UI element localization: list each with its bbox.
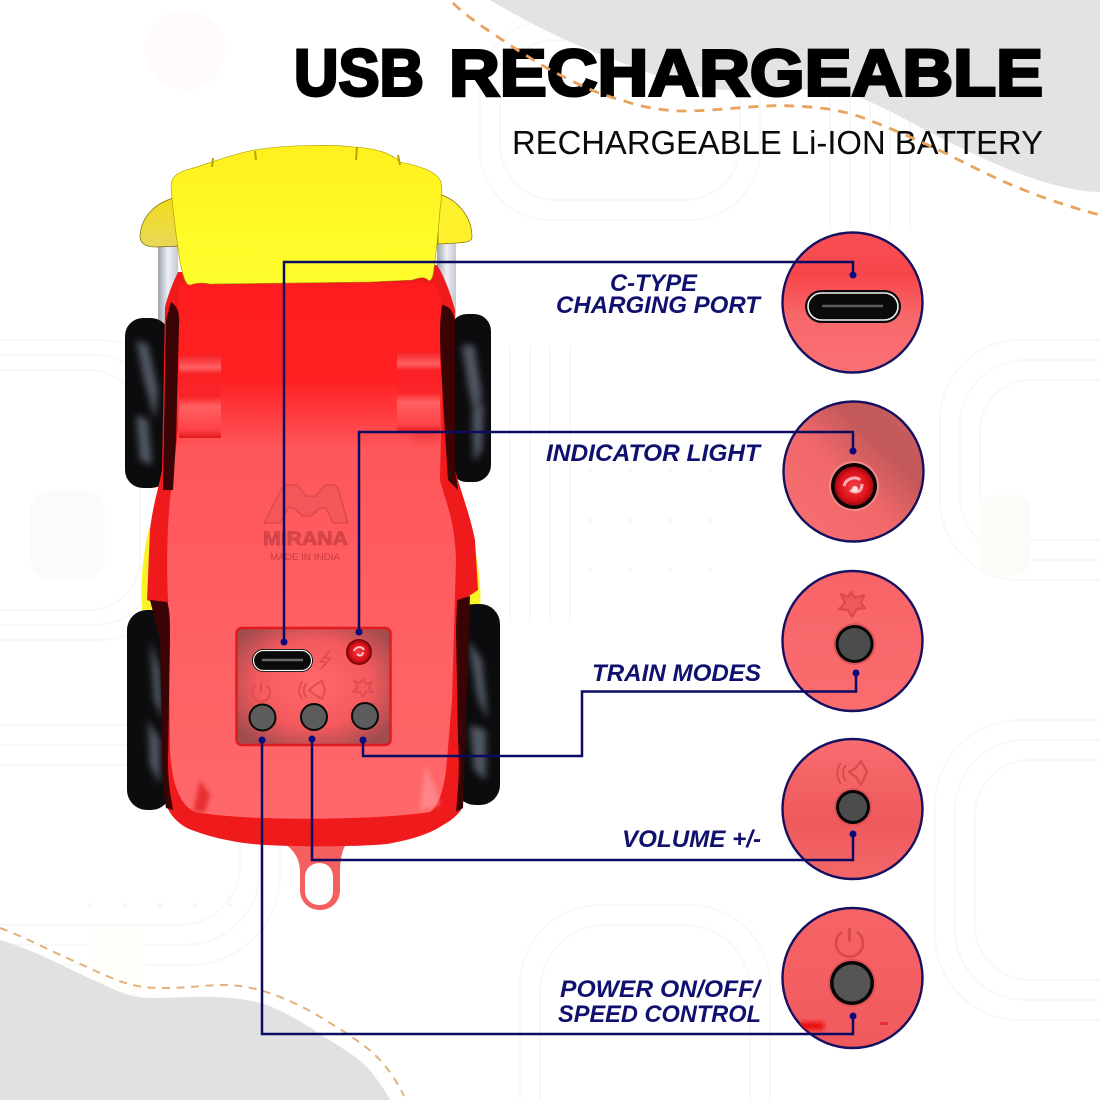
label: power on/off speed control [558,976,762,1028]
dashed wave line top [453,3,1100,215]
connector: charging port [280,262,856,646]
buttons [250,703,378,730]
side wings and posts [140,194,472,325]
subtitle: RECHARGEABLE Li-ION BATTERY [512,124,1043,161]
lower side yellow panels [141,525,481,612]
mirana logo [263,485,348,562]
label: c-type charging port: CHARGING PORT [556,292,762,319]
wheel wells [150,302,470,812]
connector: train modes [360,670,860,756]
connector: power [258,736,856,1034]
label: c-type charging port [556,270,762,319]
icon: star [353,679,373,697]
label: indicator light: INDICATOR LIGHT [546,440,762,467]
indicator led [346,639,372,665]
logo wordmark: MIRANA [263,529,348,550]
grey wave top right [490,0,1100,192]
label: power on/off speed control: SPEED CONTROL [558,1001,761,1028]
icon: power [252,683,270,702]
label: volume: VOLUME +/- [622,826,761,853]
connector: volume [308,736,856,860]
logo M mark [264,485,348,523]
label: train modes: TRAIN MODES [592,660,761,687]
detail circle: power [782,908,922,1048]
usb-c port [252,649,313,672]
label: power on/off speed control: POWER ON/OFF/ [560,976,762,1003]
logo tagline: MADE IN INDIA [270,552,340,562]
title: USB [294,36,424,110]
yellow roof [171,145,442,285]
detail circle: volume [782,739,922,879]
detail circle: train modes [782,571,922,711]
hook loop [282,842,347,910]
grey wave bottom left [0,940,390,1100]
body shading [193,375,440,812]
icon: speaker [299,681,325,699]
detail circle: indicator light [784,402,924,542]
wheels [125,314,500,810]
icon: lightning [320,650,331,669]
side tabs [179,352,440,438]
control panel [236,628,390,745]
body light interior [167,283,456,819]
label: c-type charging port: C-TYPE [610,270,698,297]
title: RECHARGEABLE [449,36,1043,110]
red body [147,265,478,846]
toy train [125,145,500,910]
detail circle: charging port [782,232,922,372]
dashed wave line bottom [0,928,404,1096]
connector: indicator light [356,432,856,636]
